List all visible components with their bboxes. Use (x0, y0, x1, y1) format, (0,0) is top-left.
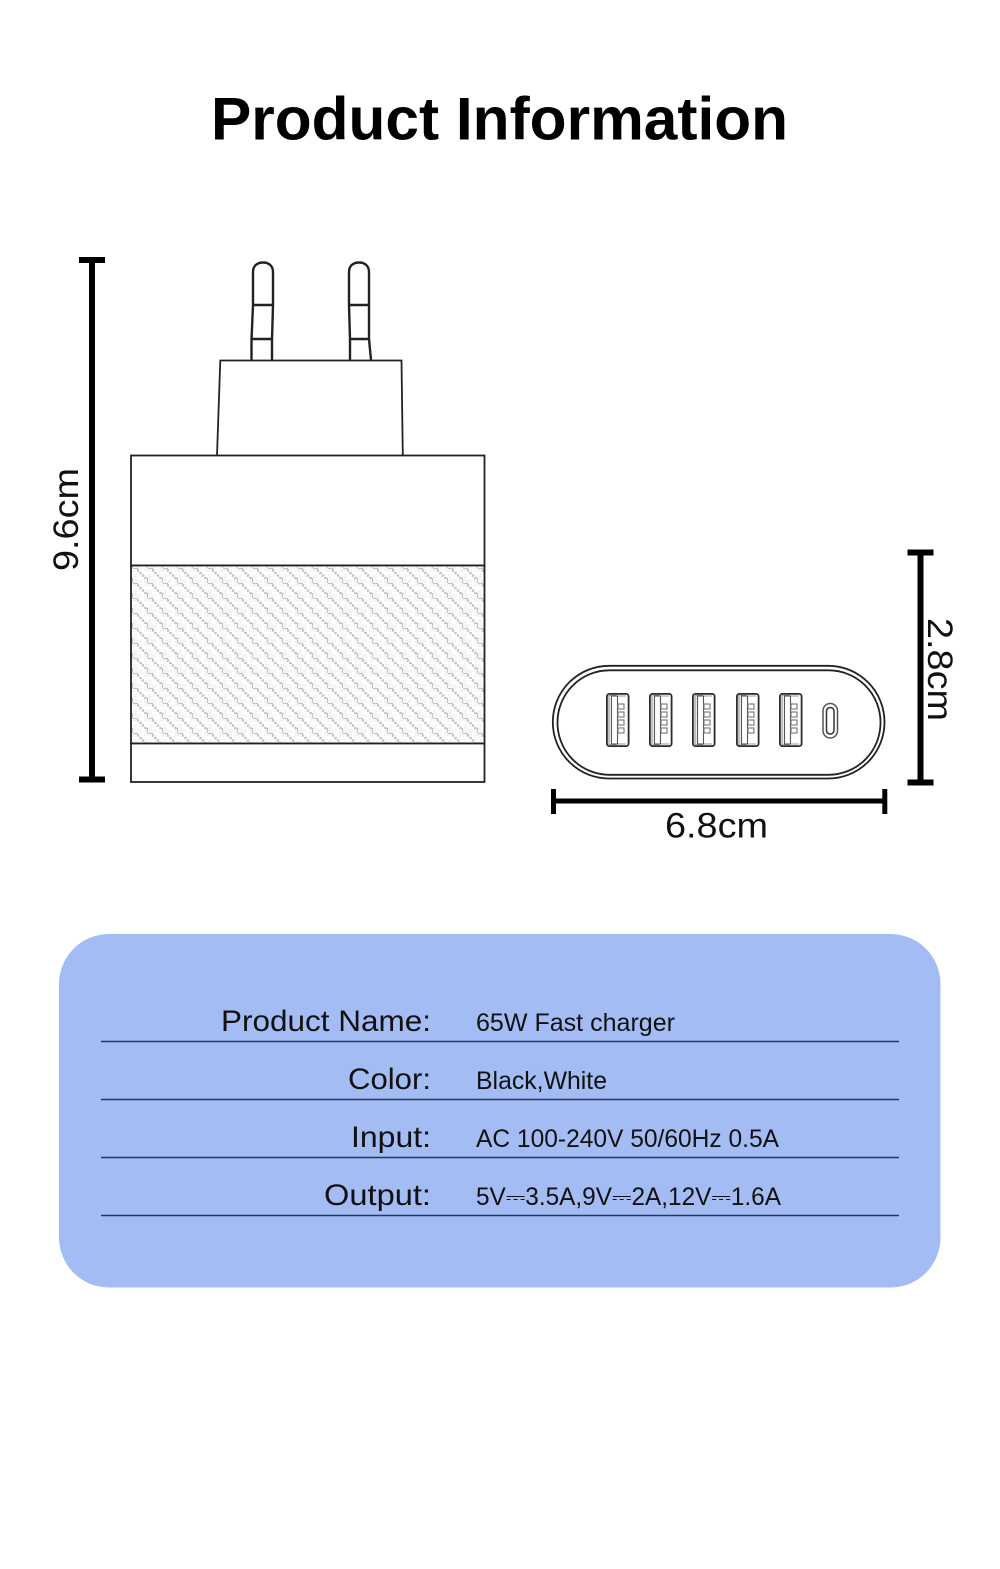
depth dimension 2.8cm: 2.8cm (920, 618, 959, 721)
row: color: Color: (348, 1063, 431, 1096)
width dimension 6.8cm: 6.8cm (665, 806, 768, 846)
outer shell (553, 666, 884, 778)
height dimension 9.6cm: 9.6cm (47, 468, 86, 571)
USB-A port 5 (780, 694, 802, 746)
charger body lower section (131, 744, 484, 782)
charger side view (131, 262, 484, 782)
row: input: Input: (351, 1121, 431, 1154)
row: input (351, 1121, 779, 1154)
row: color (348, 1063, 607, 1096)
row: output: 5V⎓3.5A,9V⎓2A,12V⎓1.6A (476, 1183, 781, 1211)
panel background (59, 934, 940, 1288)
USB-C port (823, 704, 838, 738)
carbon fibre panel (131, 566, 484, 744)
row: input: AC 100-240V 50/60Hz 0.5A (476, 1125, 779, 1153)
USB-A port 4 (737, 694, 759, 746)
panel: product specifications (59, 934, 940, 1288)
row: product name: Product Name: (221, 1005, 431, 1038)
charger front view with ports (553, 666, 884, 778)
row: output: Output: (324, 1179, 431, 1212)
row: output (324, 1179, 781, 1212)
title: Product Information (211, 86, 788, 152)
USB-A port 1 (607, 694, 629, 746)
depth dimension 2.8cm (908, 551, 959, 784)
width dimension 6.8cm (553, 789, 886, 846)
plug neck (217, 360, 403, 456)
charger body upper section (131, 456, 484, 566)
USB-A port 2 (650, 694, 672, 746)
USB-A port 3 (693, 694, 715, 746)
right plug pin (349, 262, 371, 360)
row: color: Black,White (476, 1067, 607, 1095)
left plug pin (252, 262, 273, 360)
inner shell (558, 670, 880, 775)
row: product name: 65W Fast charger (476, 1009, 675, 1037)
row: product name (221, 1005, 675, 1038)
height dimension 9.6cm (47, 259, 105, 780)
